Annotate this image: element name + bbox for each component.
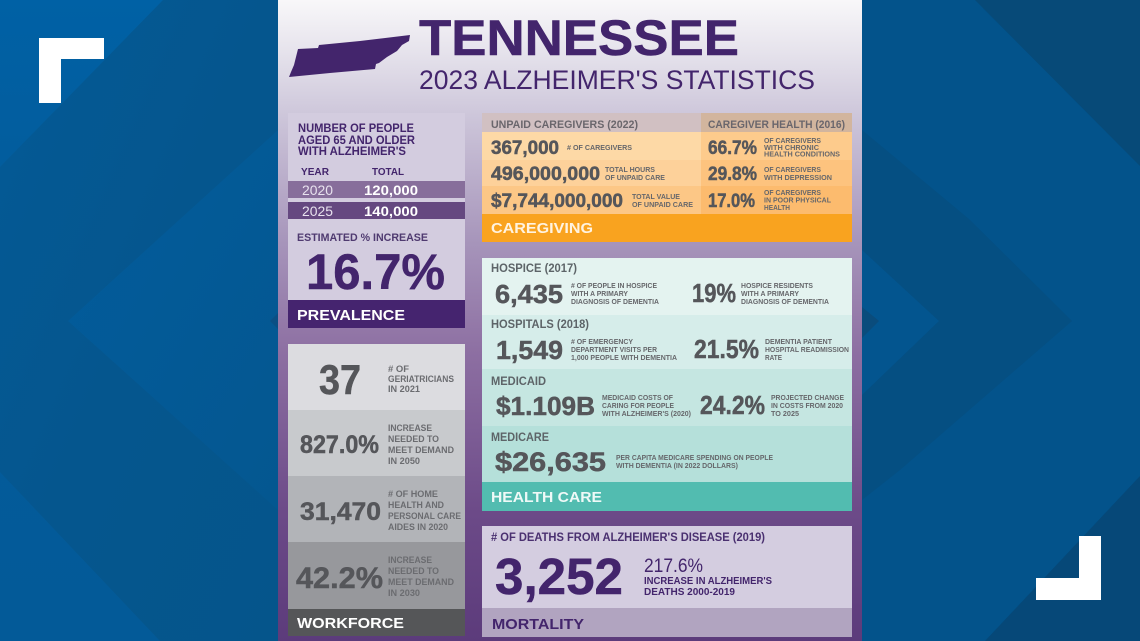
panel: mortality: # OF DEATHS FROM ALZHEIMER'S DISEASE (2019) — [491, 530, 765, 544]
panel: caregiving: # OF CAREGIVERS — [567, 145, 632, 152]
panel: prevalence: 140,000 — [364, 203, 418, 219]
panel: health care: HEALTH CARE — [491, 490, 602, 506]
panel: health care: DEMENTIA PATIENT — [765, 339, 833, 346]
panel: health care: WITH A PRIMARY — [571, 291, 628, 298]
panel: workforce: # OF — [388, 364, 409, 375]
panel: workforce: MEET DEMAND — [388, 445, 454, 456]
icon: Tennessee state silhouette — [289, 35, 410, 77]
panel: caregiving: OF CAREGIVERS — [764, 190, 821, 197]
panel: prevalence: PREVALENCE — [297, 307, 405, 324]
logo corner: top left bracket — [39, 38, 104, 103]
title — [419, 10, 815, 95]
panel: mortality: INCREASE IN ALZHEIMER'S — [644, 576, 772, 587]
panel: caregiving: OF UNPAID CARE — [632, 202, 693, 209]
panel: health care: 19% — [692, 278, 736, 308]
panel: workforce: PERSONAL CARE — [388, 511, 461, 522]
panel: workforce: IN 2050 — [388, 456, 420, 467]
panel: prevalence: WITH ALZHEIMER'S — [298, 146, 406, 158]
panel: caregiving: $7,744,000,000 — [491, 191, 623, 212]
panel: caregiving: 367,000 — [491, 138, 559, 159]
panel: caregiving: TOTAL VALUE — [632, 194, 680, 201]
panel: health care: PROJECTED CHANGE — [771, 395, 844, 402]
panel: health care: # OF EMERGENCY — [571, 339, 633, 346]
panel: health care: WITH ALZHEIMER'S (2020) — [602, 411, 691, 418]
panel: prevalence: 2025 — [302, 203, 333, 219]
panel: health care: MEDICAID — [491, 376, 546, 388]
panel: health care: 24.2% — [700, 390, 765, 420]
panel: prevalence: 2020 — [302, 182, 333, 198]
panel: health care: WITH DEMENTIA (IN 2022 DOLLARS) — [616, 463, 738, 470]
panel: caregiving: 29.8% — [708, 164, 757, 185]
panel: workforce: NEEDED TO — [388, 434, 439, 445]
title: TENNESSEE — [419, 10, 739, 66]
panel: mortality: 217.6% — [644, 556, 703, 577]
panel: prevalence: YEAR — [301, 167, 330, 178]
panel: mortality: DEATHS 2000-2019 — [644, 587, 735, 598]
panel: caregiving: CAREGIVING — [491, 221, 593, 237]
panel: workforce: WORKFORCE — [297, 615, 404, 632]
panel: workforce: 37 — [319, 356, 361, 403]
panel: workforce: HEALTH AND — [388, 500, 444, 511]
panel: health care — [482, 258, 852, 511]
panel: workforce: IN 2021 — [388, 384, 421, 395]
panel: health care: PER CAPITA MEDICARE SPENDING ON PEOPLE — [616, 455, 773, 462]
panel: caregiving: WITH CHRONIC — [764, 145, 819, 152]
panel: health care: 1,000 PEOPLE WITH DEMENTIA — [571, 355, 677, 362]
panel: health care: TO 2025 — [771, 411, 799, 418]
panel: workforce: AIDES IN 2020 — [388, 522, 448, 533]
infographic page background — [278, 0, 862, 641]
title: 2023 ALZHEIMER'S STATISTICS — [419, 65, 815, 95]
logo corner: bottom right bracket — [1036, 536, 1101, 600]
panel: health care: CARING FOR PEOPLE — [602, 403, 674, 410]
panel: health care: MEDICARE — [491, 432, 549, 444]
panel: health care: WITH A PRIMARY — [741, 291, 799, 298]
panel: workforce: 42.2% — [296, 562, 383, 595]
panel: caregiving: TOTAL HOURS — [605, 167, 655, 174]
panel: health care: DIAGNOSIS OF DEMENTIA — [741, 299, 829, 306]
panel: workforce: INCREASE — [388, 423, 432, 434]
panel: workforce: IN 2030 — [388, 588, 420, 599]
panel: workforce — [288, 344, 465, 636]
panel: prevalence: 16.7% — [306, 244, 445, 300]
panel: caregiving: IN POOR PHYSICAL — [764, 198, 832, 204]
panel: health care: 6,435 — [495, 279, 563, 309]
panel: health care: DIAGNOSIS OF DEMENTIA — [571, 299, 659, 306]
panel: caregiving: CAREGIVER HEALTH (2016) — [708, 119, 845, 131]
panel: caregiving: 17.0% — [708, 191, 755, 212]
panel: caregiving: HEALTH — [764, 205, 790, 212]
panel: health care: 21.5% — [694, 334, 759, 364]
panel: caregiving: OF CAREGIVERS — [764, 167, 821, 174]
panel: health care: HOSPICE (2017) — [491, 263, 577, 275]
panel: health care: HOSPITALS (2018) — [491, 319, 589, 331]
panel: caregiving: 66.7% — [708, 138, 757, 159]
panel: prevalence: TOTAL — [372, 167, 404, 178]
panel: health care: DEPARTMENT VISITS PER — [571, 347, 657, 354]
panel: caregiving — [482, 113, 852, 242]
panel: mortality — [482, 526, 852, 637]
panel: workforce: INCREASE — [388, 555, 432, 566]
panel: prevalence: AGED 65 AND OLDER — [298, 135, 416, 147]
panel: mortality: MORTALITY — [492, 616, 584, 633]
panel: health care: HOSPICE RESIDENTS — [741, 283, 813, 290]
panel: caregiving: WITH DEPRESSION — [764, 175, 832, 182]
panel: caregiving: OF UNPAID CARE — [605, 175, 665, 182]
panel: health care: # OF PEOPLE IN HOSPICE — [571, 283, 657, 290]
panel: health care: $26,635 — [495, 447, 606, 477]
panel: caregiving: OF CAREGIVERS — [764, 138, 821, 145]
panel: prevalence: 120,000 — [364, 182, 418, 198]
panel: health care: $1.109B — [496, 391, 595, 421]
panel: caregiving: UNPAID CAREGIVERS (2022) — [491, 119, 638, 131]
panel: prevalence: NUMBER OF PEOPLE — [298, 123, 414, 135]
panel: health care: MEDICAID COSTS OF — [602, 395, 674, 402]
panel: health care: HOSPITAL READMISSION — [765, 347, 849, 354]
panel: workforce: GERIATRICIANS — [388, 374, 454, 385]
panel: health care: 1,549 — [496, 335, 563, 365]
panel: workforce: 827.0% — [300, 431, 379, 459]
panel: caregiving: 496,000,000 — [491, 164, 600, 185]
panel: workforce: NEEDED TO — [388, 566, 439, 577]
panel: workforce: 31,470 — [300, 498, 381, 526]
panel: workforce: # OF HOME — [388, 489, 438, 500]
panel: caregiving: HEALTH CONDITIONS — [764, 152, 840, 158]
panel: workforce: MEET DEMAND — [388, 577, 454, 588]
panel: health care: IN COSTS FROM 2020 — [771, 403, 843, 410]
panel: prevalence: ESTIMATED % INCREASE — [297, 232, 428, 244]
panel: mortality: 3,252 — [495, 548, 623, 605]
panel: prevalence — [288, 113, 465, 328]
panel: health care: RATE — [765, 355, 782, 362]
